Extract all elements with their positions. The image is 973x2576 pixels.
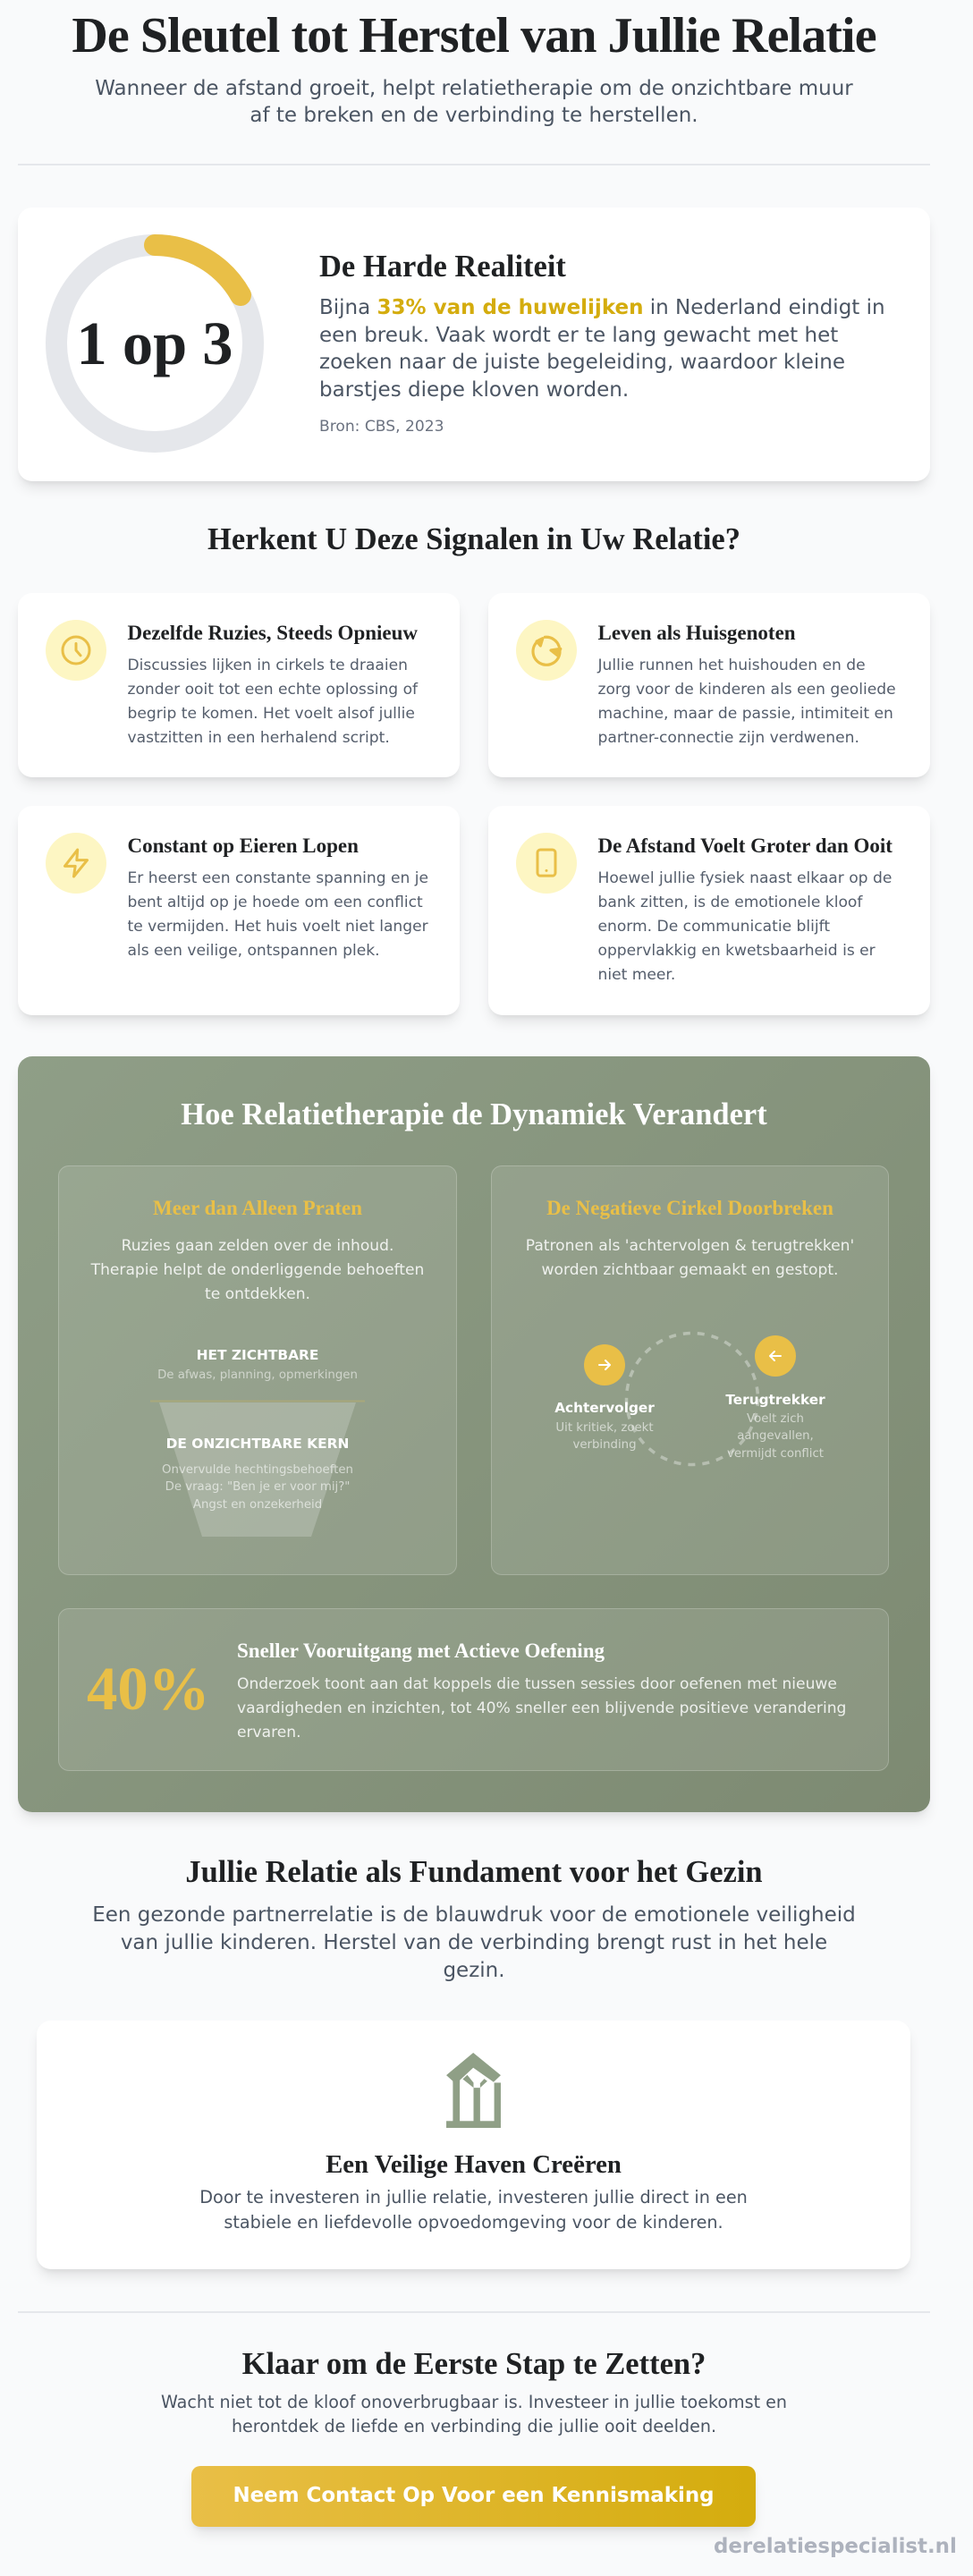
visible detail: De afwas, planning, opmerkingen (157, 1368, 358, 1382)
invisible detail: Angst en onzekerheid (193, 1498, 322, 1512)
terugtrekker detail (727, 1412, 824, 1461)
achtervolger detail: Uit kritiek, zoekt (555, 1421, 654, 1435)
haven text (199, 2187, 748, 2233)
signaal 2 text (597, 657, 896, 747)
fundament text: van jullie kinderen. Herstel van de verbinding brengt rust in het hele (121, 1931, 827, 1954)
subpanel text: Patronen als 'achtervolgen & terugtrekken' (526, 1237, 854, 1255)
achtervolger detail (555, 1421, 654, 1452)
heading: fundament: Jullie Relatie als Fundament voor het Gezin (185, 1855, 763, 1889)
heading: de harde realiteit: De Harde Realiteit (319, 250, 566, 284)
subpanel text: te ontdekken. (205, 1285, 310, 1303)
signaal 4 text: Hoewel jullie fysiek naast elkaar op de (597, 869, 892, 887)
panel: veilige haven (37, 2021, 910, 2269)
terugtrekker detail: vermijdt conflict (727, 1447, 824, 1461)
source: Bron: CBS, 2023 (319, 418, 444, 436)
subpanel heading: Meer dan Alleen Praten (153, 1197, 362, 1219)
achtervolger label: Achtervolger (554, 1400, 655, 1416)
terugtrekker detail: Voelt zich (747, 1412, 804, 1426)
panel: signaal 4 (488, 806, 930, 1015)
signaal 4 text: bank zitten, is de emotionele kloof (597, 894, 862, 911)
heading: klaar: Klaar om de Eerste Stap te Zetten? (242, 2347, 706, 2381)
subpanel text: Ruzies gaan zelden over de inhoud. (122, 1237, 393, 1255)
klaar text: Wacht niet tot de kloof onoverbrugbaar is. Investeer in jullie toekomst en (161, 2392, 787, 2412)
dynamiek heading: Hoe Relatietherapie de Dynamiek Verandert (181, 1097, 767, 1131)
signaal 4 text: enorm. De communicatie blijft (597, 918, 830, 936)
signaal 4 heading: De Afstand Voelt Groter dan Ooit (597, 835, 893, 857)
realiteit text (319, 296, 885, 402)
title: De Sleutel tot Herstel van Jullie Relatie (72, 8, 876, 64)
stat text: ervaren. (237, 1723, 301, 1741)
stat: 40%: 40% (87, 1655, 210, 1723)
subpanel heading: De Negatieve Cirkel Doorbreken (546, 1197, 833, 1219)
donut chart: 1 op 3 (46, 234, 264, 453)
stat text (237, 1674, 846, 1741)
realiteit text: een breuk. Vaak wordt er te lang gewacht met het (319, 324, 838, 347)
klaar text (161, 2392, 787, 2436)
signaal 3 text: als een veilige, ontspannen plek. (127, 942, 380, 960)
panel: signaal 2 (488, 593, 930, 777)
fundament text (92, 1903, 856, 1982)
realiteit text: barstjes diepe kloven worden. (319, 378, 629, 402)
fundament text: Een gezonde partnerrelatie is de blauwdruk voor de emotionele veiligheid (92, 1903, 856, 1927)
heading: signalen: Herkent U Deze Signalen in Uw Relatie? (207, 522, 740, 556)
signaal 4 text: oppervlakkig en kwetsbaarheid is er (597, 942, 876, 960)
donut number: 1 op 3 (76, 309, 233, 377)
panel: de harde realiteit (18, 208, 930, 481)
subpanel text (91, 1237, 424, 1303)
icon: house (446, 2053, 501, 2128)
stat text: Onderzoek toont aan dat koppels die tussen sessies door oefenen met nieuwe (237, 1674, 837, 1692)
subpanel: meer dan alleen praten (58, 1165, 457, 1575)
signaal 4 text: niet meer. (597, 966, 675, 984)
icon: arrow right (584, 1344, 625, 1385)
signaal 3 heading: Constant op Eieren Lopen (127, 835, 359, 857)
subpanel text (526, 1237, 854, 1279)
signaal 4 text (597, 869, 892, 984)
signaal 2 heading: Leven als Huisgenoten (597, 622, 796, 644)
icon: phone (516, 833, 577, 894)
subtitle: Wanneer de afstand groeit, helpt relatietherapie om de onzichtbare muur (95, 77, 853, 100)
icon: arrow left (755, 1335, 796, 1377)
klaar text: herontdek de liefde en verbinding die jullie ooit deelden. (232, 2416, 716, 2436)
icon: torn circle (516, 620, 577, 681)
iceberg graphic (150, 1401, 365, 1537)
panel: signaal 3 (18, 806, 460, 1015)
fundament text: gezin. (443, 1959, 505, 1982)
signaal 1 text: Discussies lijken in cirkels te draaien (127, 657, 408, 674)
terugtrekker detail: aangevallen, (737, 1429, 814, 1443)
subtitle (95, 77, 853, 127)
invisible label: DE ONZICHTBARE KERN (166, 1436, 349, 1452)
signaal 2 text: zorg voor de kinderen als een geoliede (597, 681, 896, 699)
subpanel text: Therapie helpt de onderliggende behoeften (91, 1261, 424, 1279)
signaal 2 text: Jullie runnen het huishouden en de (597, 657, 866, 674)
icon: lightning bolt (46, 833, 106, 894)
signaal 1 text (127, 657, 419, 747)
haven text: stabiele en liefdevolle opvoedomgeving voor de kinderen. (224, 2212, 723, 2233)
invisible detail (162, 1463, 353, 1512)
signaal 2 text: partner-connectie zijn verdwenen. (597, 729, 859, 747)
signaal 1 text: zonder ooit tot een echte oplossing of (127, 681, 418, 699)
terugtrekker label: Terugtrekker (725, 1392, 825, 1408)
signaal 3 text: te vermijden. Het huis voelt niet langer (127, 918, 428, 936)
dashed cycle (624, 1331, 760, 1467)
signaal 1 text: begrip te komen. Het voelt alsof jullie (127, 705, 415, 723)
subpanel: 40 procent (58, 1608, 889, 1771)
invisible detail: Onvervulde hechtingsbehoeften (162, 1463, 353, 1477)
realiteit text: Bijna 33% van de huwelijken in Nederland eindigt in (319, 296, 885, 319)
haven heading: Een Veilige Haven Creëren (326, 2150, 622, 2179)
realiteit text: zoeken naar de juiste begeleiding, waardoor kleine (319, 351, 845, 374)
signaal 3 text (127, 869, 428, 960)
signaal 3 text: Er heerst een constante spanning en je (127, 869, 428, 887)
invisible detail: De vraag: "Ben je er voor mij?" (165, 1480, 350, 1494)
subpanel text: worden zichtbaar gemaakt en gestopt. (542, 1261, 838, 1279)
signaal 1 heading: Dezelfde Ruzies, Steeds Opnieuw (127, 622, 418, 644)
stat text: vaardigheden en inzichten, tot 40% sneller een blijvende positieve verandering (237, 1699, 846, 1717)
signaal 3 text: bent altijd op je hoede om een conflict (127, 894, 423, 911)
subtitle: af te breken en de verbinding te herstellen. (250, 104, 698, 127)
stat heading: Sneller Vooruitgang met Actieve Oefening (237, 1640, 605, 1662)
subpanel: negatieve cirkel (491, 1165, 889, 1575)
signaal 1 text: vastzitten in een herhalend script. (127, 729, 390, 747)
watermark: derelatiespecialist.nl (714, 2535, 957, 2558)
haven text: Door te investeren in jullie relatie, investeren jullie direct in een (199, 2187, 748, 2207)
visible label: HET ZICHTBARE (197, 1347, 318, 1363)
panel: dynamiek (18, 1056, 930, 1812)
signaal 2 text: machine, maar de passie, intimiteit en (597, 705, 893, 723)
icon: clock (46, 620, 106, 681)
button (191, 2466, 756, 2527)
panel: signaal 1 (18, 593, 460, 777)
button: Neem Contact Op Voor een Kennismaking (233, 2484, 714, 2507)
achtervolger detail: verbinding (572, 1438, 637, 1452)
